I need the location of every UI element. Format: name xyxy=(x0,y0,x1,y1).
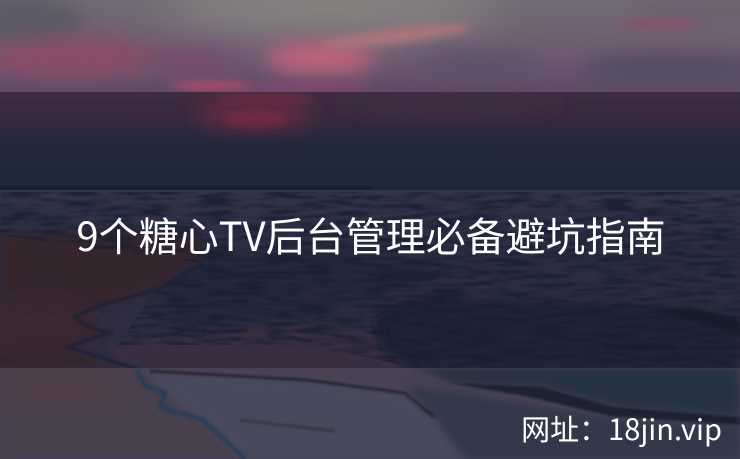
dark wave masses xyxy=(156,250,440,325)
shoreline edges xyxy=(68,263,203,370)
website address: 网址：18jin.vip xyxy=(521,407,722,449)
ripple texture xyxy=(0,192,740,368)
wet sand, left xyxy=(0,232,203,368)
light sandy wash between waves xyxy=(118,328,388,364)
foam patch, centre xyxy=(158,376,424,454)
title: 9个糖心TV后台管理必备避坑指南 xyxy=(76,205,666,263)
dark water, bottom right xyxy=(405,385,740,459)
horizon surf line xyxy=(0,187,370,191)
lighter lower band with foam lines xyxy=(0,368,740,459)
dark sea band below horizon xyxy=(0,92,740,140)
sand, bottom left xyxy=(2,405,232,457)
blue-dark shoreline xyxy=(137,370,245,459)
dark rock wave xyxy=(398,270,438,282)
sky with sunset clouds xyxy=(0,0,740,92)
lower water and beach in the dark band xyxy=(0,190,740,368)
